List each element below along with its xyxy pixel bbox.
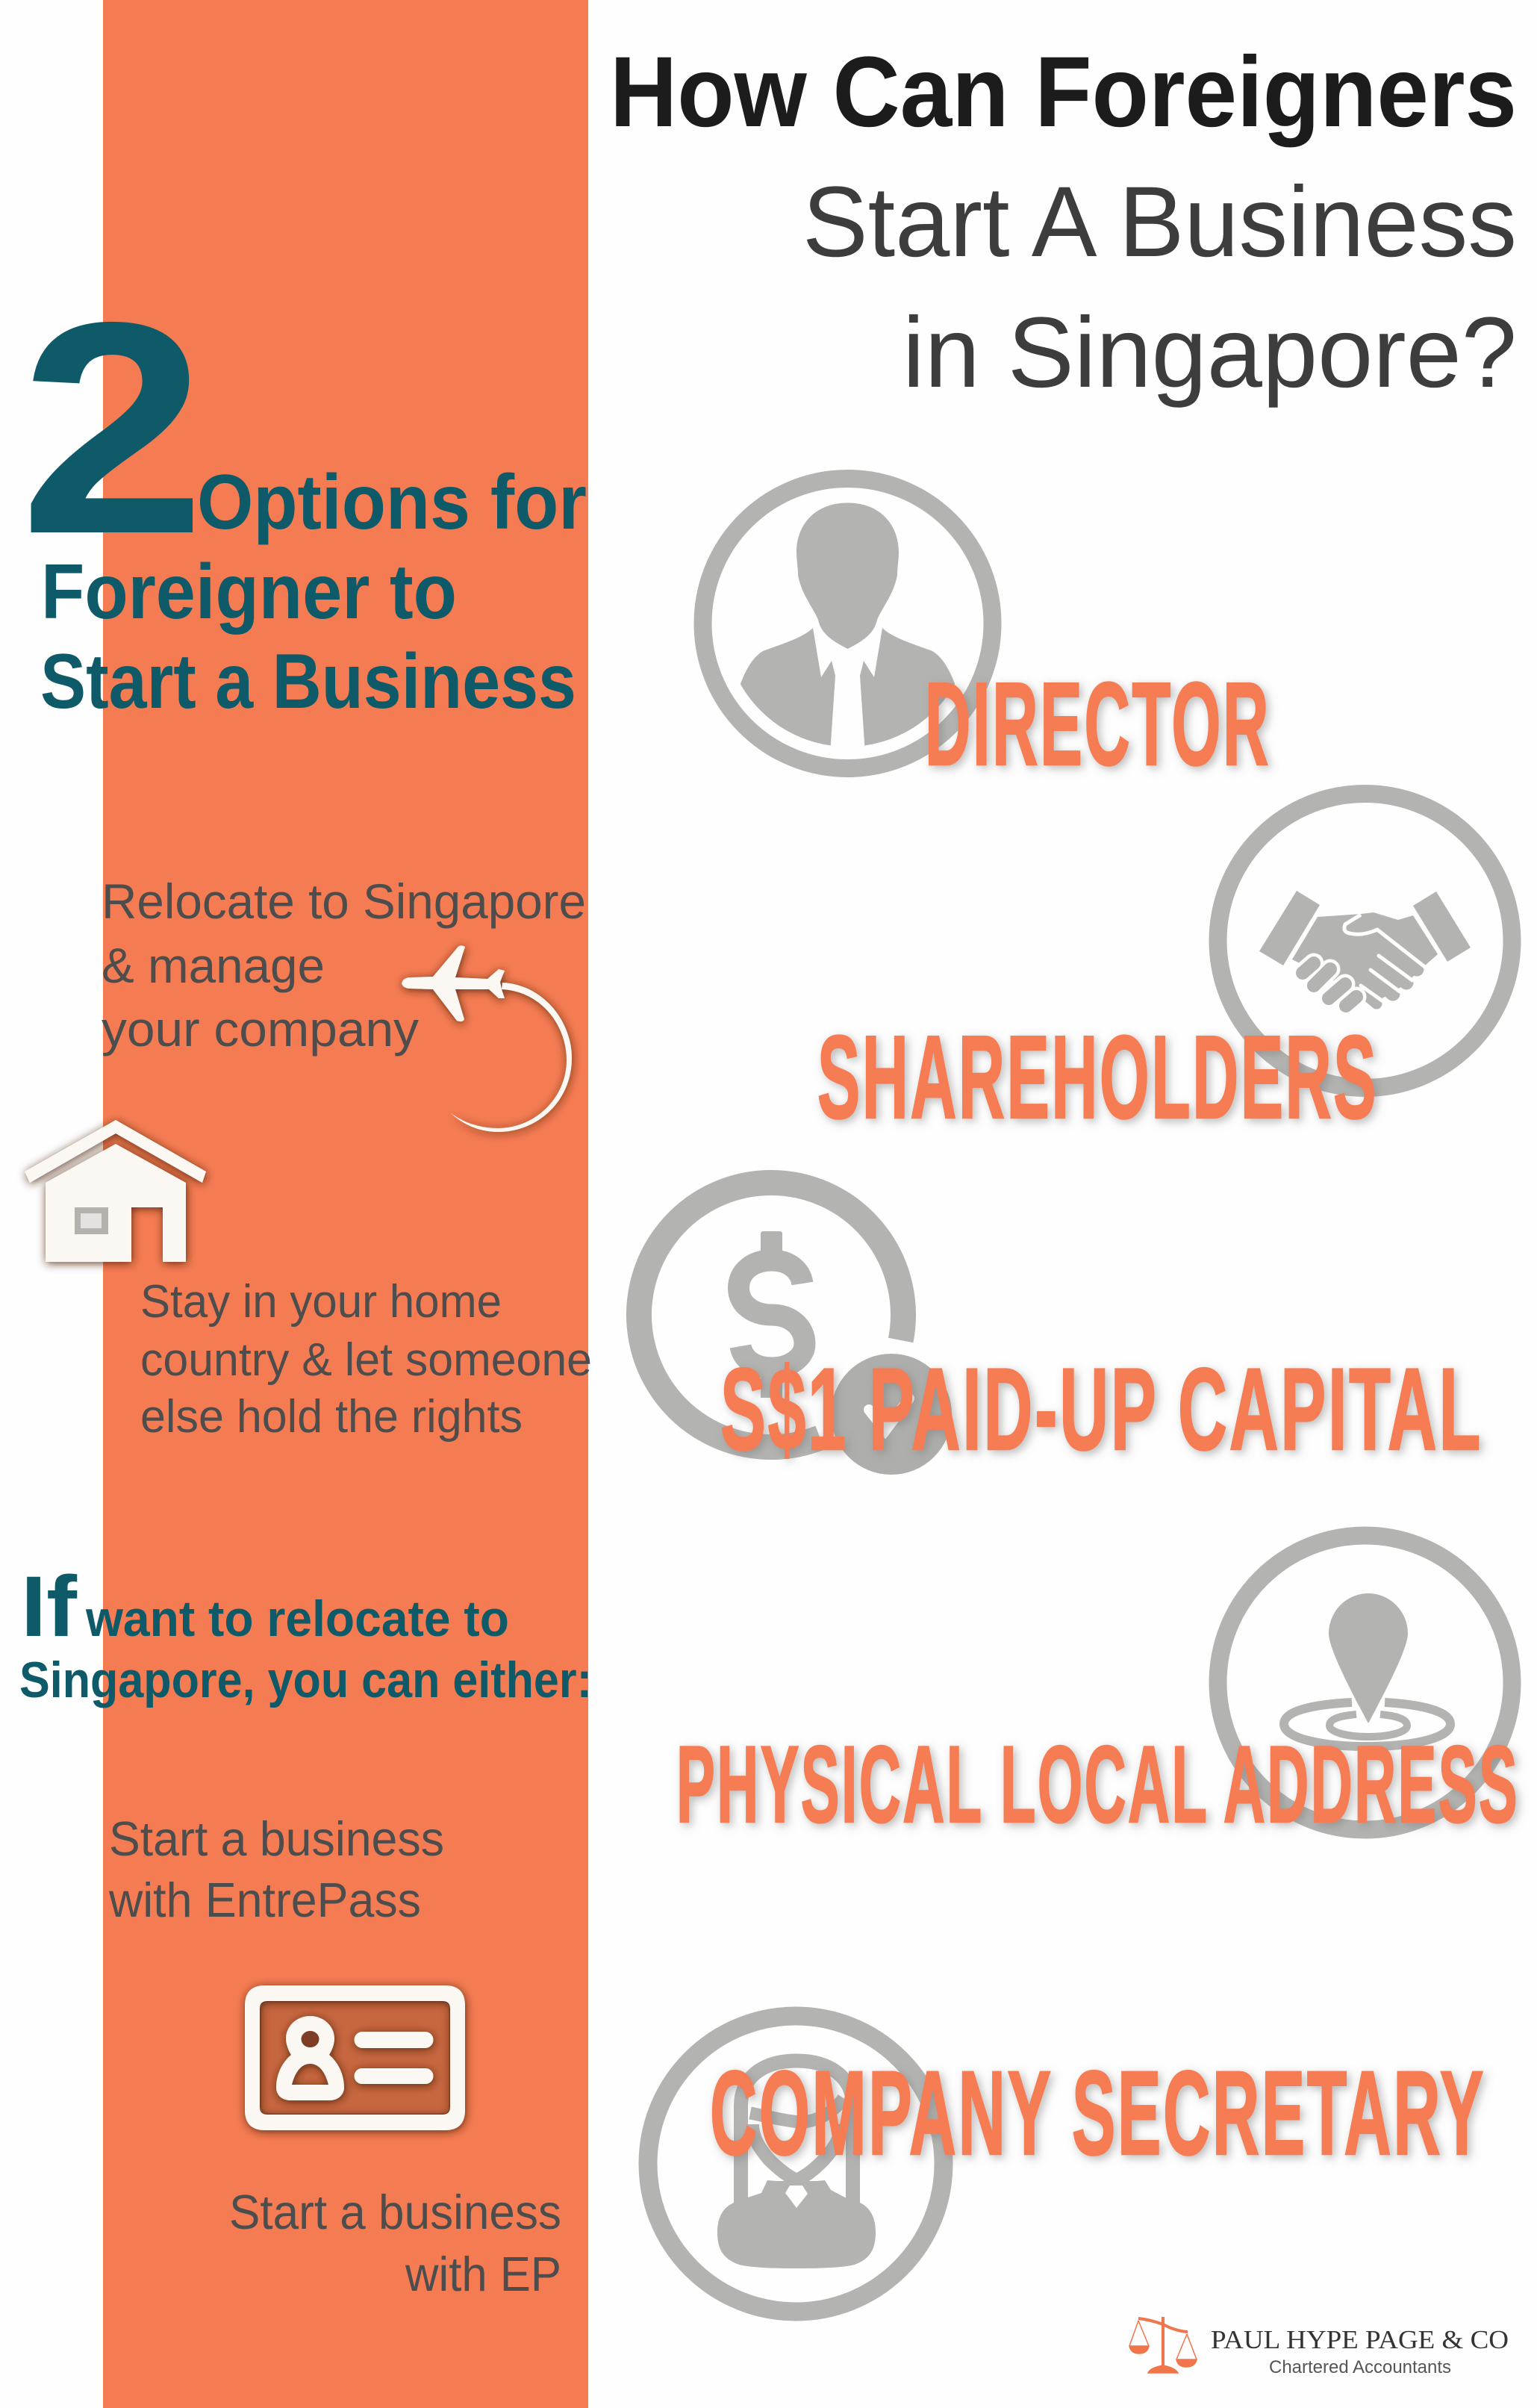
text: stay in your home country: Stay in your home <box>140 1276 502 1328</box>
title: in Singapore? <box>902 297 1517 408</box>
text: stay in your home country: country & let someone <box>140 1334 592 1386</box>
text: relocate to Singapore <box>102 874 586 1057</box>
text: relocate to Singapore: your company <box>102 1001 419 1057</box>
logo: Paul Hype Page & Co: PAUL HYPE PAGE & CO <box>1211 2325 1509 2354</box>
icon: ID card <box>245 1985 465 2130</box>
icon: company secretary <box>648 2016 944 2312</box>
icon: house <box>25 1120 206 1262</box>
icon: dollar with check badge <box>639 1183 952 1475</box>
icon: handshake <box>1218 794 1512 1088</box>
heading: 2 options for foreigner to start a business: Options for <box>197 459 587 546</box>
text: stay in your home country: else hold the rights <box>140 1391 523 1443</box>
text: relocate to Singapore: & manage <box>102 938 325 993</box>
title: Start A Business <box>802 167 1517 278</box>
heading: 2 options for foreigner to start a business: Foreigner to <box>41 549 457 635</box>
heading: if want to relocate: want to relocate to <box>85 1590 509 1647</box>
text: start a business with EP: Start a business <box>229 2185 561 2239</box>
logo: Paul Hype Page & Co <box>1129 2317 1509 2377</box>
logo: Paul Hype Page & Co: Chartered Accountants <box>1269 2357 1451 2377</box>
heading: 2 options for foreigner to start a business: 2 <box>19 259 206 597</box>
heading: if want to relocate: If <box>21 1559 78 1655</box>
icon: location pin <box>1218 1535 1512 1829</box>
text: relocate to Singapore: Relocate to Singapore <box>102 874 586 929</box>
heading: 2 options for foreigner to start a business <box>19 259 587 725</box>
title <box>610 37 1517 408</box>
heading: if want to relocate <box>19 1559 592 1708</box>
text: start a business with EntrePass: with EntrePass <box>108 1873 421 1927</box>
icon: scales <box>1129 2317 1197 2373</box>
heading: if want to relocate: Singapore, you can either: <box>19 1652 592 1708</box>
icon: airplane with return arc <box>402 945 572 1132</box>
icon: director <box>703 479 993 768</box>
heading: 2 options for foreigner to start a business: Start a Business <box>40 638 576 725</box>
text: start a business with EP: with EP <box>405 2247 561 2301</box>
text: stay in your home country <box>140 1276 592 1443</box>
text: start a business with EntrePass: Start a business <box>109 1811 444 1866</box>
text: start a business with EntrePass <box>108 1811 444 1927</box>
panel: orange vertical band <box>103 0 588 2408</box>
text: start a business with EP <box>229 2185 561 2301</box>
